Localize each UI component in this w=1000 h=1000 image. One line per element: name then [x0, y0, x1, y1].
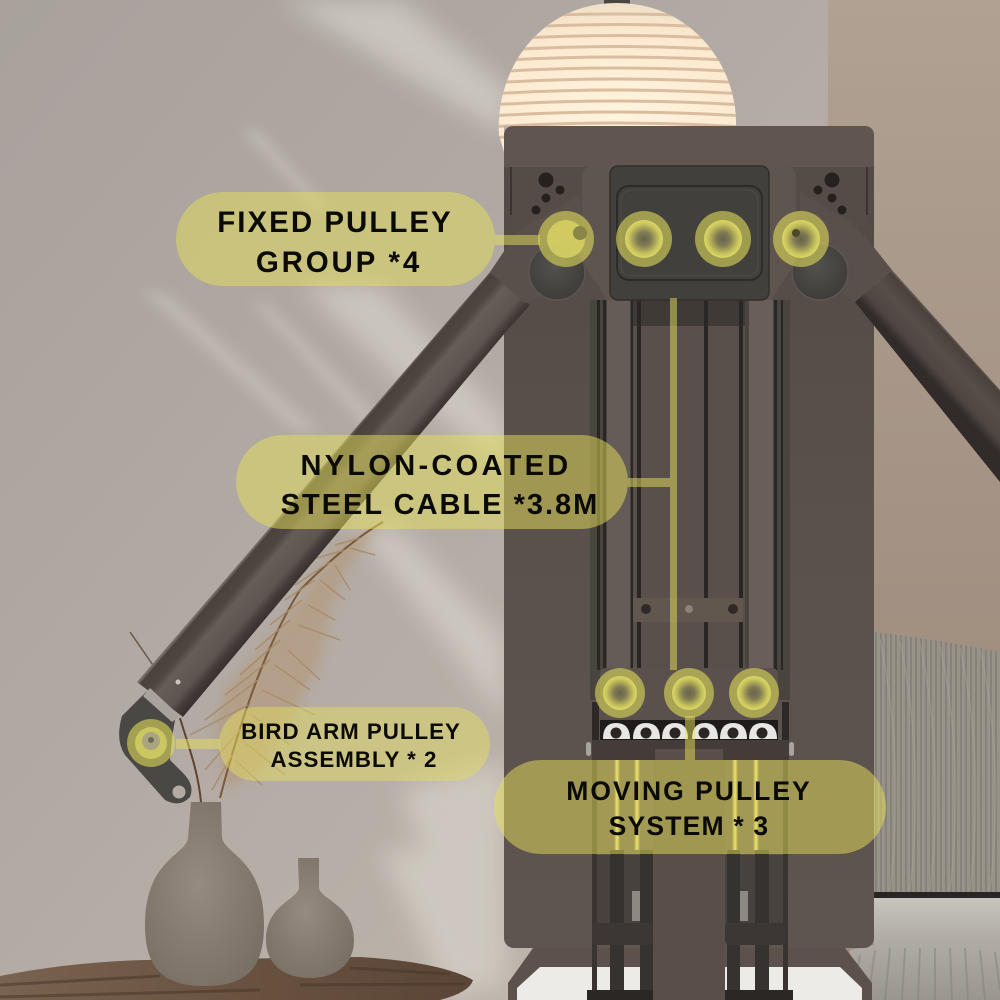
- pampas grass: [130, 522, 383, 802]
- callout: fixed pulley group: FIXED PULLEY: [217, 206, 453, 239]
- side table: [0, 957, 473, 1000]
- sofa: [845, 632, 1000, 1000]
- bird arm pulley: [127, 719, 175, 767]
- callout: fixed pulley group: GROUP *4: [256, 246, 422, 279]
- pendant lamp: [490, 0, 745, 155]
- callout: nylon-coated steel cable: [236, 435, 628, 529]
- machine body: [504, 126, 874, 948]
- base frame: [508, 948, 872, 1000]
- cable channel: [590, 300, 790, 700]
- callout: bird arm pulley assembly: ASSEMBLY * 2: [271, 747, 437, 772]
- vases: [145, 802, 354, 986]
- moving pulley carriage: [586, 668, 794, 850]
- right arm: [800, 192, 1000, 482]
- callout: fixed pulley group: [176, 192, 540, 286]
- callout: nylon-coated steel cable: STEEL CABLE *3.8M: [281, 489, 599, 521]
- fixed pulley mount: [529, 166, 848, 300]
- fixed pulleys: [538, 211, 829, 267]
- lower cables: [587, 755, 793, 1000]
- moving pulleys: [595, 668, 779, 718]
- callout: bird arm pulley assembly: [176, 707, 490, 781]
- callout connector: cable line: [628, 298, 695, 760]
- callout: moving pulley system: SYSTEM * 3: [609, 811, 769, 841]
- callout: nylon-coated steel cable: NYLON-COATED: [300, 450, 572, 482]
- left arm: [137, 195, 584, 717]
- callout: moving pulley system: MOVING PULLEY: [566, 776, 812, 806]
- callout: bird arm pulley assembly: BIRD ARM PULLEY: [241, 719, 461, 744]
- callout: moving pulley system: [494, 760, 886, 854]
- bird arm pulley bracket: [119, 688, 191, 803]
